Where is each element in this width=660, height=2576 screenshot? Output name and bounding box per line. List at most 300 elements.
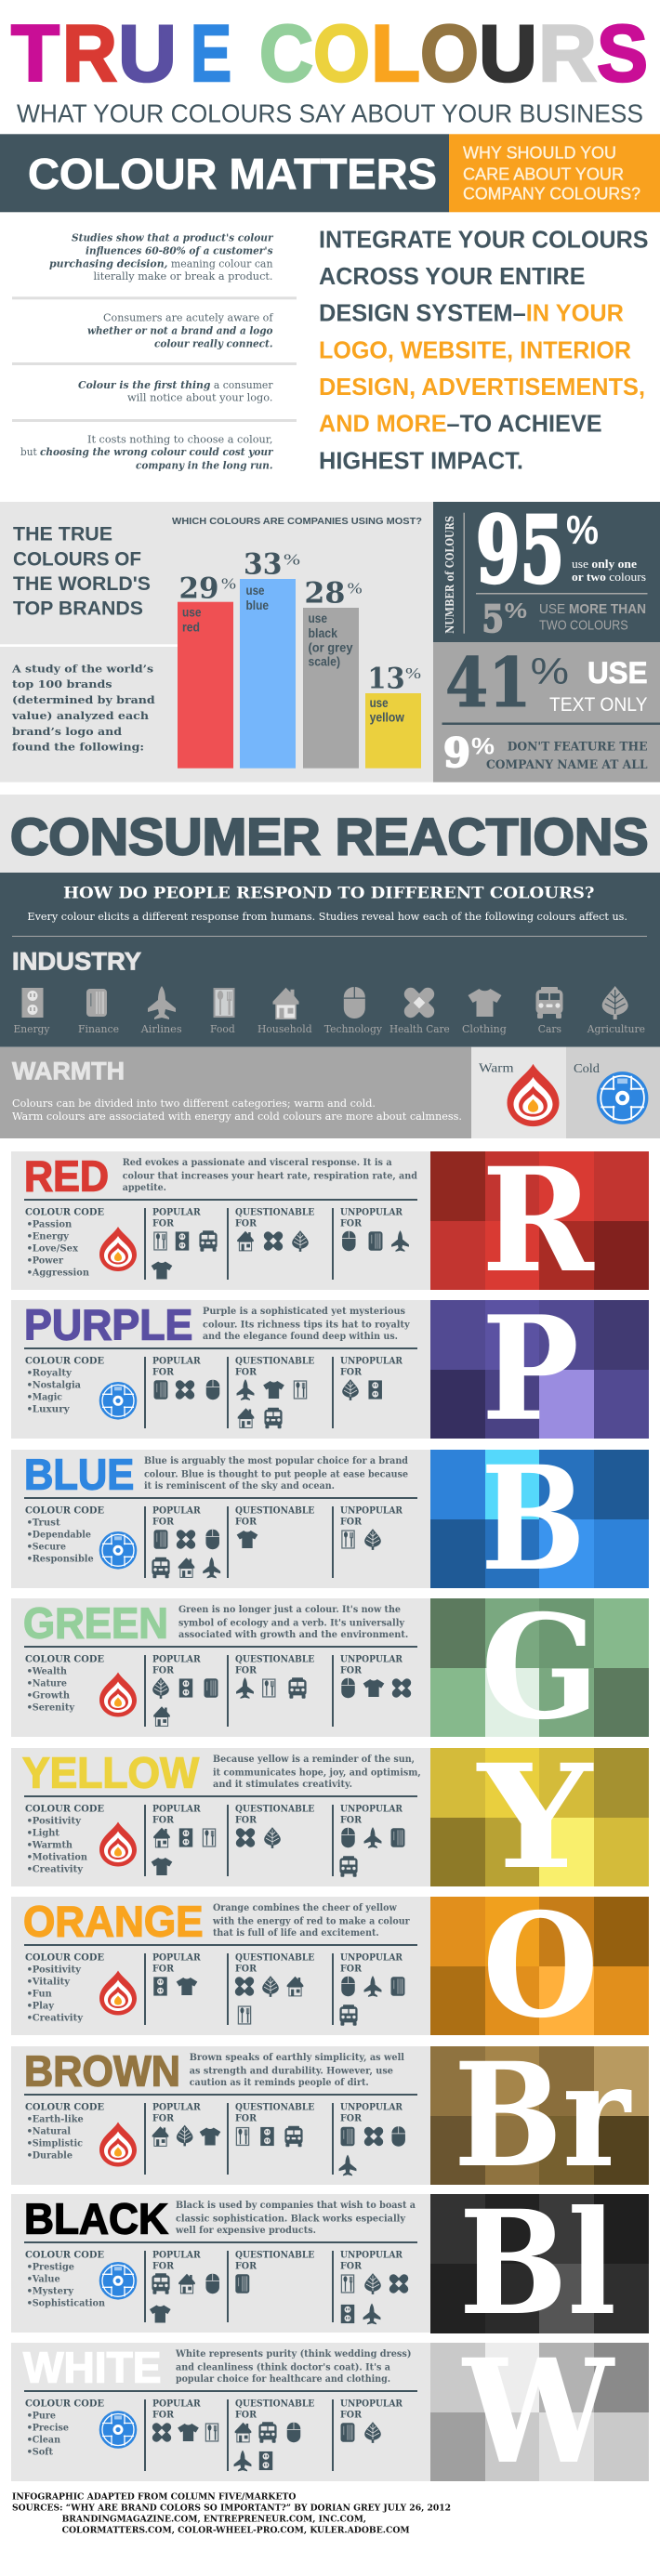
icon: technology — [324, 987, 382, 1035]
panel: consumer reactions — [0, 795, 660, 873]
colour code list: • — [26, 1816, 33, 1827]
callout: why care: COMPANY COLOURS? — [463, 183, 640, 203]
icon: agriculture — [587, 986, 645, 1035]
bar: blue 33% — [240, 547, 300, 769]
stat: 95%: use only one — [572, 558, 637, 571]
icon: airlines — [140, 986, 182, 1035]
icon: cold — [99, 2411, 137, 2449]
fact: wrong colour: but choosing the wrong colour could cost your — [20, 445, 273, 458]
text block: integrate your colours: AND MORE–TO ACHIEVE — [319, 412, 602, 438]
questionable for: FOR — [235, 1665, 257, 1676]
title: R — [62, 9, 117, 99]
description: symbol of ecology and a verb. It's universally — [178, 1617, 405, 1628]
questionable for: FOR — [235, 1815, 257, 1825]
unpopular for — [332, 2102, 405, 2175]
title: O — [313, 9, 370, 99]
description: Black is used by companies that wish to boast a — [176, 2200, 416, 2211]
label: number of colours: NUMBER of COLOURS — [442, 516, 456, 634]
bar: blue 33%: 33 — [244, 547, 282, 581]
title: U — [118, 9, 177, 99]
tile: B — [430, 1435, 649, 1603]
unpopular for: FOR — [340, 1218, 363, 1229]
colour code list — [25, 1804, 104, 1875]
heading: true colours of top brands: THE TRUE — [13, 524, 112, 545]
title: U — [479, 9, 537, 99]
colour code list: Luxury — [33, 1404, 71, 1415]
tile: P — [430, 1285, 649, 1453]
popular for — [144, 1654, 218, 1727]
unpopular for — [332, 1207, 409, 1280]
colour code list: Serenity — [33, 1702, 75, 1714]
description: classic sophistication. Black works especially — [176, 2213, 406, 2224]
colour code list — [25, 1952, 104, 2024]
popular for — [144, 1207, 218, 1280]
fact: first thing: Colour is the first thing a consumer — [78, 378, 273, 391]
description — [175, 2348, 411, 2385]
tile: Br: Br — [454, 2031, 632, 2200]
icon: warm — [99, 1673, 137, 1717]
stat: 41%: % — [531, 651, 569, 692]
description — [175, 2200, 416, 2236]
stat: 95%: % — [566, 507, 599, 553]
popular for — [144, 1952, 201, 2025]
colour code list: • — [26, 2138, 33, 2149]
unpopular for: FOR — [340, 1665, 363, 1676]
stat: 5%: USE MORE THAN — [539, 601, 646, 617]
colour code list: • — [26, 1678, 33, 1689]
text block: intro: Every colour elicits a different response from humans. Studies reveal how each of the following colours affect us. — [27, 911, 627, 923]
title: T — [11, 9, 59, 99]
popular for: FOR — [152, 2113, 175, 2123]
stat: 9% — [443, 730, 648, 777]
description: White represents purity (think wedding dress) — [175, 2348, 411, 2359]
text block: integrate your colours — [319, 228, 649, 474]
tile: B: B — [481, 1435, 586, 1603]
stat: 95%: or two colours — [572, 571, 646, 584]
title — [11, 9, 648, 99]
tile: Y: Y — [476, 1733, 594, 1901]
popular for: POPULAR — [152, 2102, 201, 2112]
questionable for: QUESTIONABLE — [235, 2102, 315, 2112]
colour code list: Play — [33, 2001, 55, 2012]
colour code list: COLOUR CODE — [25, 2399, 104, 2409]
description — [123, 1157, 418, 1193]
popular for: POPULAR — [152, 2250, 201, 2260]
popular for: FOR — [152, 1367, 175, 1377]
questionable for — [227, 2399, 315, 2471]
colour code list: • — [26, 2435, 33, 2446]
description: and the elegance found deep within us. — [203, 1331, 398, 1342]
colour code list: COLOUR CODE — [25, 1952, 104, 1963]
popular for: POPULAR — [152, 1654, 201, 1664]
title: R — [538, 9, 597, 99]
bar: yellow 13%: 13 — [367, 663, 405, 696]
icon: cars — [535, 987, 563, 1035]
text block: study description: found the following: — [12, 740, 144, 753]
description — [144, 1455, 409, 1492]
description: and it stimulates creativity. — [213, 1779, 352, 1790]
bar: black 28%: 28 — [304, 576, 345, 610]
popular for: FOR — [152, 1964, 175, 1974]
heading: purple: PURPLE — [24, 1301, 192, 1349]
colour code list: COLOUR CODE — [25, 1356, 104, 1366]
industry icon row — [13, 985, 645, 1035]
fact: wrong colour: company in the long run. — [136, 458, 273, 471]
colour code list: Sophistication — [33, 2298, 105, 2309]
popular for — [144, 1804, 216, 1876]
description: Because yellow is a reminder of the sun, — [213, 1754, 415, 1765]
colour code list: Nature — [33, 1678, 67, 1689]
popular for — [144, 2250, 219, 2322]
colour code list: Positivity — [33, 1965, 82, 1976]
description: Red evokes a passionate and visceral response. It is a — [123, 1157, 392, 1168]
bar: yellow 13%: use — [370, 696, 389, 710]
stat: 5% — [482, 598, 646, 641]
heading: true colours of top brands — [13, 524, 151, 620]
stat: 41% — [445, 643, 647, 723]
bar: black 28%: black — [309, 626, 337, 640]
heading: blue: BLUE — [24, 1451, 134, 1499]
icon: cars: Cars — [538, 1022, 561, 1035]
heading: colour matters: COLOUR MATTERS — [28, 150, 437, 198]
questionable for: FOR — [235, 2410, 257, 2420]
fact: purchasing decision: Studies show that a product's colour — [72, 230, 273, 243]
questionable for — [227, 1654, 315, 1727]
colour code list: Wealth — [32, 1666, 67, 1677]
bar: blue 33%: use — [245, 584, 265, 598]
footer: sources: INFOGRAPHIC ADAPTED FROM COLUMN FIVE/MARKETO — [12, 2491, 296, 2502]
questionable for: QUESTIONABLE — [235, 1356, 315, 1366]
questionable for: FOR — [235, 2113, 257, 2123]
colour code list: • — [26, 1690, 33, 1702]
unpopular for: FOR — [340, 1815, 363, 1825]
questionable for — [227, 2102, 315, 2175]
stat: 5%: % — [505, 598, 527, 623]
colour code list: Positivity — [33, 1816, 82, 1827]
unpopular for — [332, 1804, 404, 1877]
colour code list — [25, 1356, 104, 1415]
panel: green — [11, 1584, 649, 1752]
questionable for: FOR — [235, 1964, 257, 1974]
stat: 5%: 5 — [482, 598, 504, 641]
colour code list: • — [26, 2262, 33, 2273]
unpopular for: UNPOPULAR — [340, 2250, 403, 2260]
colour code list: Natural — [33, 2126, 71, 2137]
description — [212, 1902, 410, 1939]
description — [178, 1604, 408, 1640]
fact: brand connection: Consumers are acutely aware of — [103, 311, 273, 324]
unpopular for: UNPOPULAR — [340, 1654, 403, 1664]
text block: colour facts — [12, 230, 297, 471]
icon: technology: Technology — [324, 1022, 382, 1035]
text block: warmth description: Colours can be divided into two different categories; warm and cold. — [12, 1097, 376, 1110]
stat: 95%: 95 — [476, 497, 564, 604]
popular for: FOR — [152, 1815, 175, 1825]
description — [203, 1306, 411, 1342]
heading: true colours of top brands: COLOURS OF — [13, 549, 141, 571]
colour code list: • — [26, 2013, 33, 2024]
panel: purple — [11, 1285, 649, 1453]
popular for: FOR — [152, 2261, 175, 2271]
colour code list: • — [26, 2298, 33, 2309]
footer: sources: SOURCES: “WHY ARE BRAND COLORS SO IMPORTANT?” BY DORIAN GREY JULY 26, 2012 — [12, 2503, 451, 2513]
colour code list: • — [26, 1518, 33, 1529]
tile: R — [430, 1137, 649, 1305]
panel: red — [11, 1137, 649, 1305]
colour code list: • — [26, 1554, 33, 1565]
popular for: FOR — [152, 1665, 175, 1676]
bar: red 29%: use — [182, 605, 202, 619]
popular for: POPULAR — [152, 1804, 201, 1814]
panel: text only — [433, 642, 660, 782]
questionable for: QUESTIONABLE — [235, 1804, 315, 1814]
colour code list — [25, 1207, 104, 1279]
description: Brown speaks of earthly simplicity, as well — [190, 2052, 404, 2063]
popular for — [144, 2102, 220, 2175]
colour code list: COLOUR CODE — [25, 1505, 104, 1516]
questionable for — [227, 2250, 315, 2322]
unpopular for: UNPOPULAR — [340, 2102, 403, 2112]
description: colour. Its richness tips its hat to royalty — [203, 1319, 411, 1330]
banner: colour matters — [0, 134, 660, 212]
unpopular for — [332, 1654, 413, 1727]
colour code list: • — [26, 2001, 33, 2012]
popular for: FOR — [152, 2410, 175, 2420]
popular for: FOR — [152, 1517, 175, 1527]
bar: red 29% — [178, 572, 236, 769]
fact: brand connection: whether or not a brand and a logo — [87, 323, 273, 336]
icon: agriculture: Agriculture — [587, 1022, 645, 1035]
tile: G: G — [481, 1584, 600, 1752]
text block: integrate your colours: DESIGN, ADVERTISEMENTS, — [319, 375, 645, 401]
questionable for: QUESTIONABLE — [235, 1952, 315, 1963]
heading: warmth: WARMTH — [12, 1058, 125, 1085]
questionable for — [227, 1207, 315, 1280]
heading: true colours of top brands: TOP BRANDS — [13, 598, 143, 620]
footer: sources: COLORMATTERS.COM, COLOR-WHEEL-PRO.COM, KULER.ADOBE.COM — [62, 2525, 410, 2535]
text block: study description: (determined by brand — [12, 693, 155, 706]
colour code list: Nostalgia — [33, 1380, 81, 1391]
popular for: POPULAR — [152, 1207, 201, 1217]
panel: top brands study — [0, 502, 433, 782]
tile: P: P — [482, 1285, 579, 1453]
chart heading: WHICH COLOURS ARE COMPANIES USING MOST? — [172, 516, 422, 527]
bar: black 28%: scale) — [309, 655, 340, 669]
icon: warm — [99, 1227, 137, 1271]
colour code list: • — [26, 1530, 33, 1541]
colour code list: Dependable — [33, 1530, 91, 1541]
description: Blue is arguably the most popular choice for a brand — [144, 1455, 409, 1466]
heading: white: WHITE — [23, 2344, 162, 2392]
tile: R: R — [482, 1137, 595, 1305]
unpopular for: FOR — [340, 2113, 363, 2123]
colour code list: COLOUR CODE — [25, 1654, 104, 1664]
icon: finance — [78, 989, 119, 1035]
popular for: FOR — [152, 1218, 175, 1229]
questionable for — [227, 1356, 315, 1428]
panel: black — [11, 2179, 649, 2347]
colour code list: • — [26, 1965, 33, 1976]
description: it communicates hope, joy, and optimism, — [213, 1767, 421, 1778]
text block: integrate your colours: ACROSS YOUR ENTIRE — [319, 264, 586, 290]
icon: health care: Health Care — [389, 1022, 450, 1035]
icon: finance: Finance — [78, 1022, 119, 1035]
unpopular for: UNPOPULAR — [340, 1356, 403, 1366]
bar: yellow 13% — [365, 663, 421, 769]
legend: warm: Warm — [479, 1061, 514, 1075]
description: and cleanliness (think doctor's coat). It's a — [176, 2361, 390, 2372]
colour code list: COLOUR CODE — [25, 1207, 104, 1217]
heading: true colours of top brands: THE WORLD'S — [13, 573, 151, 595]
unpopular for: UNPOPULAR — [340, 1207, 403, 1217]
colour code list: • — [26, 1852, 33, 1863]
questionable for: FOR — [235, 1218, 257, 1229]
panel: brown — [11, 2031, 649, 2200]
bar chart — [178, 547, 421, 769]
colour code list: • — [26, 1989, 33, 2000]
unpopular for — [332, 1505, 403, 1578]
icon: cold — [99, 1382, 137, 1420]
unpopular for — [332, 1356, 403, 1428]
colour code list: • — [26, 2423, 33, 2434]
text block: warmth description — [12, 1097, 462, 1123]
heading: yellow: YELLOW — [22, 1749, 200, 1797]
description: colour. Blue is thought to put people at ease because — [144, 1468, 408, 1479]
icon: energy — [13, 988, 50, 1035]
questionable for — [227, 1505, 315, 1578]
colour code list: • — [26, 1977, 33, 1988]
colour code list: • — [26, 2114, 33, 2125]
unpopular for: FOR — [340, 1367, 363, 1377]
heading: orange: ORANGE — [23, 1898, 204, 1946]
title: L — [371, 9, 420, 99]
questionable for: QUESTIONABLE — [235, 2250, 315, 2260]
fact: first thing — [78, 378, 273, 404]
colour code list: Prestige — [33, 2262, 74, 2273]
title: O — [420, 9, 479, 99]
unpopular for: FOR — [340, 2261, 363, 2271]
title: E — [191, 9, 231, 99]
icon: warm — [99, 1821, 137, 1866]
text block: integrate your colours: DESIGN SYSTEM–IN YOUR — [319, 301, 624, 327]
colour code list: Durable — [33, 2150, 73, 2162]
colour code list: Motivation — [33, 1852, 87, 1863]
unpopular for — [332, 2399, 403, 2471]
callout: why care: WHY SHOULD YOU — [463, 143, 616, 163]
callout: why care: CARE ABOUT YOUR — [463, 164, 624, 183]
tile: O: O — [482, 1882, 599, 2050]
bar: yellow 13%: yellow — [370, 711, 404, 725]
description: that is full of life and excitement. — [213, 1927, 379, 1939]
bar: blue 33%: % — [284, 550, 300, 568]
heading: consumer reactions: CONSUMER REACTIONS — [10, 807, 649, 866]
colour code list: Fun — [33, 1989, 52, 2000]
footer: sources: BRANDINGMAGAZINE.COM, ENTREPRENEUR.COM, INC.COM, — [62, 2514, 366, 2524]
colour code list: Pure — [33, 2411, 56, 2422]
colour code list — [25, 2250, 105, 2309]
icon: household — [257, 988, 312, 1035]
colour code list: Royalty — [33, 1368, 73, 1379]
colour code list: • — [26, 1255, 33, 1267]
tile: O — [430, 1882, 649, 2050]
description: Green is no longer just a colour. It's now the — [178, 1604, 401, 1615]
description: Purple is a sophisticated yet mysterious — [203, 1306, 405, 1317]
colour code list: Magic — [33, 1392, 62, 1403]
colour code list: Light — [33, 1828, 59, 1839]
text block: study description: brand’s logo and — [12, 725, 122, 738]
text block: integrate your colours: HIGHEST IMPACT. — [319, 448, 523, 474]
popular for: POPULAR — [152, 1505, 201, 1516]
colour code list: • — [26, 2126, 33, 2137]
questionable for: FOR — [235, 2261, 257, 2271]
colour code list: Mystery — [33, 2286, 74, 2297]
description: associated with growth and the environment. — [178, 1629, 408, 1640]
tile: Bl: Bl — [459, 2179, 616, 2347]
tile: W: W — [461, 2328, 615, 2496]
questionable for: FOR — [235, 1517, 257, 1527]
popular for — [144, 1505, 220, 1578]
colour code list: Passion — [33, 1219, 73, 1230]
colour code list: Soft — [33, 2447, 53, 2458]
bar: blue 33%: blue — [245, 598, 269, 612]
text block: warmth description: Warm colours are associated with energy and cold colours are more about calmness. — [12, 1111, 462, 1123]
colour code list: • — [26, 1219, 33, 1230]
colour code list: Warmth — [32, 1840, 73, 1851]
text block: study description: top 100 brands — [12, 677, 112, 690]
description: popular choice for healthcare and clothing. — [176, 2373, 390, 2385]
unpopular for — [332, 2250, 410, 2324]
popular for: POPULAR — [152, 1356, 201, 1366]
panel: industry — [0, 873, 660, 1047]
colour code list: • — [26, 1243, 33, 1255]
colour code list: Power — [33, 1255, 63, 1267]
description — [190, 2052, 404, 2088]
colour code list: Precise — [33, 2423, 69, 2434]
panel: number of colours — [433, 497, 660, 642]
unpopular for: FOR — [340, 1964, 363, 1974]
text block: study description — [11, 662, 155, 753]
colour code list: • — [26, 2411, 33, 2422]
unpopular for: FOR — [340, 1517, 363, 1527]
popular for — [144, 1356, 219, 1428]
icon: health care — [389, 985, 450, 1035]
bar: black 28% — [303, 576, 363, 769]
icon: cold — [99, 2262, 137, 2300]
unpopular for: UNPOPULAR — [340, 1505, 403, 1516]
legend: cold: Cold — [574, 1062, 600, 1076]
footer: sources — [12, 2491, 451, 2535]
colour code list: • — [26, 2447, 33, 2458]
tile: G — [430, 1584, 649, 1752]
colour code list: Responsible — [33, 1554, 94, 1565]
colour code list: • — [26, 2286, 33, 2297]
questionable for: QUESTIONABLE — [235, 2399, 315, 2409]
title: C — [259, 9, 313, 99]
stat: 41%: TEXT ONLY — [549, 694, 647, 716]
colour code list — [25, 2399, 104, 2458]
colour code list: • — [26, 1380, 33, 1391]
colour code list: • — [26, 1368, 33, 1379]
popular for: POPULAR — [152, 2399, 201, 2409]
questionable for: FOR — [235, 1367, 257, 1377]
description: well for expensive products. — [175, 2225, 316, 2236]
icon: airlines: Airlines — [140, 1022, 182, 1035]
colour code list: COLOUR CODE — [25, 2250, 104, 2260]
questionable for — [227, 1804, 315, 1876]
colour code list: • — [26, 1840, 33, 1851]
icon: clothing: Clothing — [462, 1022, 507, 1035]
colour code list: • — [26, 1542, 33, 1553]
